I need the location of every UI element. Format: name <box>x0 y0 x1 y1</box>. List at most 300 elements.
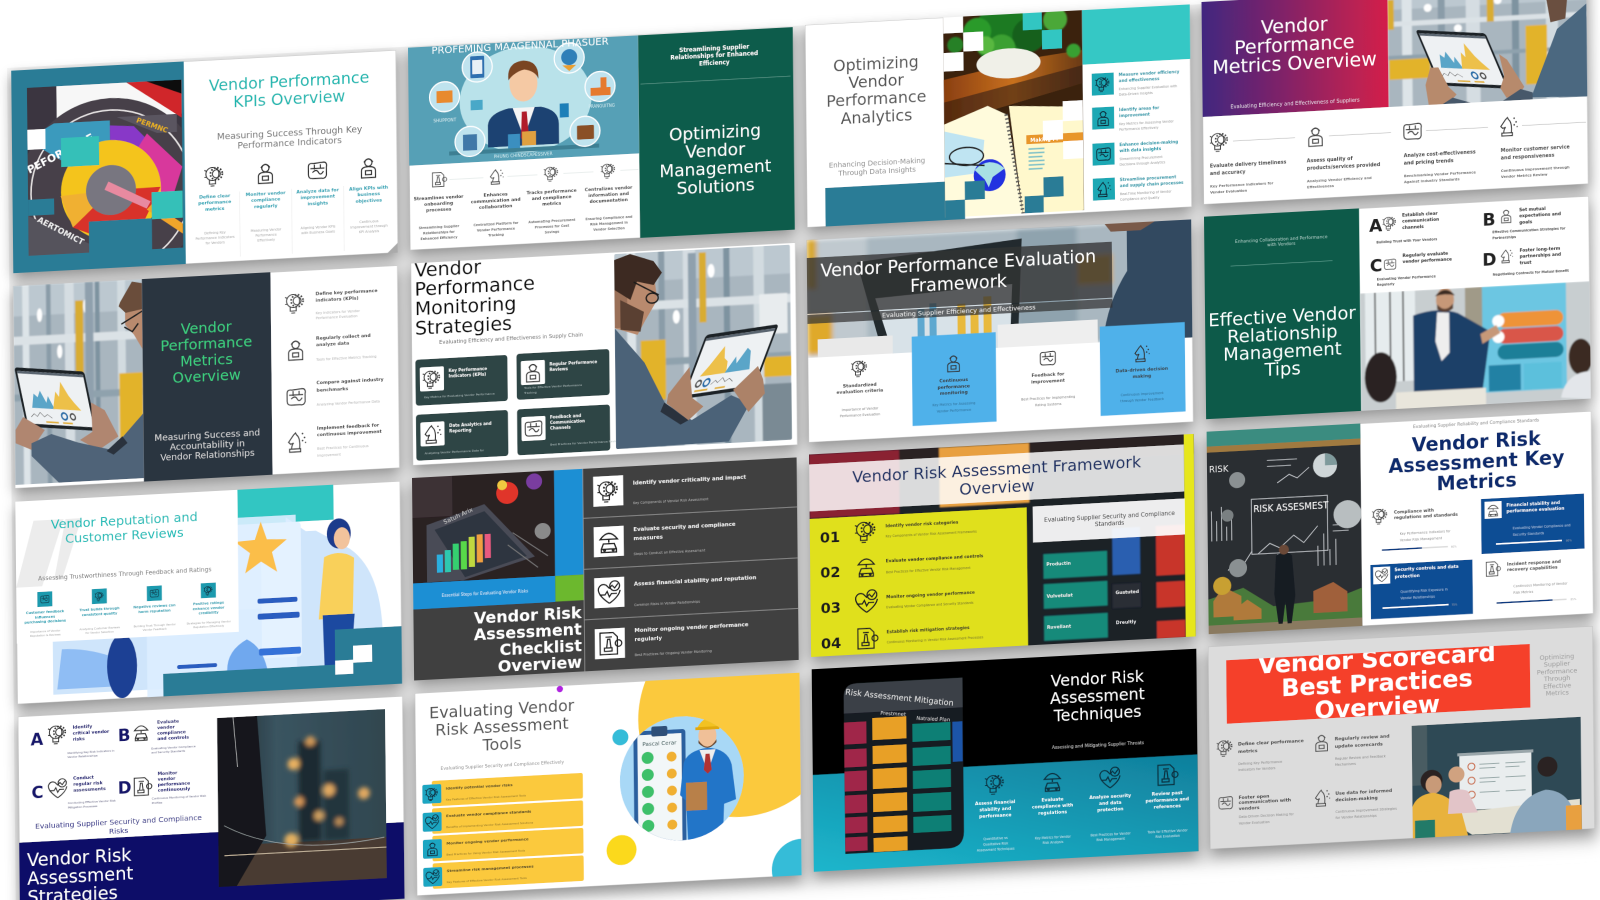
metric headings: Incident response and <box>1507 559 1561 568</box>
blue caption bar <box>413 576 555 610</box>
meeting photo <box>1360 280 1593 412</box>
risk headings: Evaluate <box>157 719 179 726</box>
risk headings: critical vendor <box>73 729 110 737</box>
desk photo <box>943 0 1084 226</box>
tip notes: Indicators for Vendors <box>1238 766 1276 772</box>
analytics list: improvement <box>1119 112 1150 118</box>
strategy cards: Key Performance <box>449 366 487 373</box>
review columns <box>24 582 232 638</box>
technique notes: Key Metrics for Vendor <box>1035 835 1072 840</box>
feature headings: Tracks performance <box>527 188 577 196</box>
subtitle band <box>807 299 1112 324</box>
metric notes: Key Performance Indicators for <box>1400 529 1451 536</box>
title: Framework <box>910 272 1008 297</box>
feature headings: processes <box>426 206 452 214</box>
side subtitle: Streamlining Supplier <box>679 44 749 54</box>
analytics list: with data insights <box>1119 146 1162 153</box>
title: Performance <box>826 87 926 111</box>
review columns: Importance of Vendor <box>30 628 61 634</box>
tip letters: D <box>1482 250 1497 271</box>
checklist notes <box>633 497 712 657</box>
side note: Optimizing <box>1540 652 1574 662</box>
metrics list <box>285 288 384 459</box>
title: Assessment Key <box>1388 446 1565 478</box>
subtitle: Through Data Insights <box>837 166 916 178</box>
tip headings: Foster open <box>1239 794 1269 801</box>
technique notes: Qualitative Risk <box>983 841 1008 847</box>
navy band <box>19 822 405 900</box>
metric headings <box>1394 500 1565 580</box>
subtitle: Vendor Relationships <box>160 449 255 464</box>
risk notes: Profiles <box>152 800 163 805</box>
label: board column: Prestmnet <box>880 711 906 718</box>
tip headings: trust <box>1520 260 1532 266</box>
progress bars: 85% <box>1571 597 1577 601</box>
metrics list: Analyzing Vendor Performance Data <box>317 399 380 407</box>
numbered items: Establish risk mitigation strategies <box>887 625 970 634</box>
metrics list: Key Indicators for Vendor <box>316 309 360 315</box>
feature headings: documentation <box>590 197 628 205</box>
blue base band <box>825 181 965 227</box>
banner title: Overview <box>1314 690 1440 725</box>
slide: Evaluating Vendor Risk Assessment Tools <box>414 607 844 900</box>
tip icons <box>1383 210 1513 270</box>
green accent <box>555 574 584 602</box>
timeline notes: Benchmarking Vendor Performance <box>1404 170 1476 178</box>
metric headings: recovery capabilities <box>1507 564 1558 573</box>
tip notes: Effective Communication Strategies for <box>1492 226 1566 234</box>
risk headings: Identify <box>73 724 92 731</box>
tip headings: Set mutual <box>1519 206 1546 213</box>
checklist headings: Evaluate security and compliance <box>633 522 736 533</box>
title: Vendor Performance Evaluation <box>820 247 1096 282</box>
technique notes: Assessment Techniques <box>977 846 1015 852</box>
turquoise header block <box>1082 4 1191 65</box>
progress bars <box>1382 538 1577 611</box>
KPI headings: Analyze data for <box>296 187 340 196</box>
tip headings: update scorecards <box>1335 741 1383 750</box>
checklist headings <box>633 474 757 643</box>
KPI notes: for Vendors <box>205 240 225 245</box>
title: Vendor <box>1261 13 1328 39</box>
title: Overview <box>959 476 1035 499</box>
timeline notes: Vendor Evaluation <box>1210 189 1248 195</box>
slide: Effective Vendor Relationship Management Tips <box>1204 196 1593 421</box>
tip notes: Building Trust with Your Vendors <box>1376 237 1437 244</box>
metrics list: Performance Evaluation <box>316 314 358 320</box>
framework icons <box>851 345 1150 377</box>
checklist headings: Identify vendor criticality and impact <box>633 475 746 487</box>
feature headings <box>414 185 633 214</box>
slide: Vendor Risk Assessment Key Metrics <box>1207 411 1593 635</box>
metric headings: regulations and standards <box>1394 512 1458 521</box>
slide: Vendor Risk Assessment Strategies <box>18 696 405 900</box>
label: gauge arc text: PEFORMACE <box>25 132 96 176</box>
KPI headings <box>198 185 388 213</box>
review columns: Positive ratings <box>193 601 224 606</box>
feature notes: Risk Management in <box>590 220 629 226</box>
metric headings: performance evaluation <box>1506 505 1564 515</box>
label: RISK on board: RISK <box>1209 465 1229 476</box>
tip notes: Partnerships <box>1492 235 1516 240</box>
timeline headings: and pricing trends <box>1404 158 1454 167</box>
KPI headings: Monitor vendor <box>246 190 286 198</box>
numbered items: Best Practices for Effective Vendor Risk Management <box>886 566 971 574</box>
dark panel <box>142 272 273 482</box>
title: Vendor <box>848 70 904 92</box>
label: tablet text: Satuh Arix <box>443 506 474 526</box>
white subtitle card <box>1033 498 1185 543</box>
title: Evaluating Vendor <box>429 696 575 723</box>
panel title: Management <box>1223 338 1342 366</box>
red banner <box>1226 644 1530 724</box>
title: Optimizing <box>833 52 919 76</box>
framework notes: Importance of Vendor <box>842 406 879 412</box>
tip notes: Regular Review and Feedback <box>1335 754 1386 761</box>
risk headings: compliance <box>157 729 186 737</box>
risk notes: Identifying Key Risk Indicators in <box>67 749 115 755</box>
metrics list: Best Practices for Continuous <box>317 444 369 451</box>
slide: Vendor Risk Assessment Framework Overview <box>809 434 1196 658</box>
analytics list: Data-Driven Insights <box>1119 91 1153 97</box>
KPI headings: improvement <box>300 194 336 202</box>
strategy cards: Feedback and <box>550 413 581 420</box>
timeline notes: Analyzing Vendor Efficiency and <box>1307 176 1372 183</box>
strategy cards: Channels <box>550 425 571 431</box>
metrics list: Compare against industry <box>316 377 384 386</box>
feature columns <box>432 162 638 187</box>
metric notes <box>1400 523 1571 601</box>
title: Tools <box>481 733 522 755</box>
timeline headings: products/services provided <box>1307 162 1381 172</box>
KPI headings: performance <box>198 199 231 207</box>
feature notes: Processes for Cost <box>535 224 570 229</box>
slide: Vendor Risk Assessment Checklist Overview <box>412 457 799 680</box>
label: illustration heading: PROFEMING MAAGENNAL PHASUER <box>431 36 609 57</box>
tool rows: Streamline risk management processes <box>447 864 534 873</box>
analytics list: Performance Effectively <box>1119 126 1159 132</box>
KPI headings: insights <box>307 200 328 207</box>
tool rows: Identify potential vendor risks <box>446 782 513 791</box>
title: Risk Assessment <box>435 714 569 740</box>
slide: Vendor Performance Metrics Overview gradient <box>1202 0 1590 204</box>
tip headings <box>1238 733 1392 812</box>
feature headings: Enhances <box>484 191 508 199</box>
columns <box>204 159 376 258</box>
timeline headings: Evaluate delivery timeliness <box>1210 160 1286 170</box>
numbered items: Continuous Monitoring in Vendor Risk Assessment Processes <box>887 635 984 644</box>
feature notes: Vendor Selection <box>593 226 625 232</box>
technique icons <box>985 764 1178 795</box>
desk tablet photo <box>412 470 555 584</box>
risk notes: and Security Standards <box>151 749 186 755</box>
feature notes: Ensuring Compliance and <box>585 215 633 221</box>
metric headings: Compliance with <box>1394 508 1434 516</box>
slide: Vendor Performance Metrics Overview dark <box>13 265 400 490</box>
timeline notes <box>1210 165 1570 195</box>
board labels <box>1046 557 1139 631</box>
tip notes: Vendor Evaluation <box>1239 820 1270 826</box>
framework headings: performance <box>937 383 970 391</box>
label: lower caption: PHUNG CHINDSCAPESSIVER <box>494 151 553 159</box>
KPI notes: KPI Analysis <box>359 229 379 234</box>
blue metric cards <box>1481 494 1585 554</box>
right yellow strip <box>1184 434 1196 637</box>
tip headings: Regularly evaluate <box>1402 251 1448 259</box>
purple dot <box>557 686 563 692</box>
feature headings: metrics <box>542 201 562 208</box>
slide: Vendor Performance Monitoring Strategies <box>411 239 798 467</box>
risk notes: Conducting Effective Vendor Risk <box>68 798 116 805</box>
framework headings: Feedback for <box>1031 371 1065 379</box>
title: KPIs Overview <box>233 86 345 111</box>
green side panel <box>638 27 795 238</box>
KPI headings: metrics <box>205 206 225 213</box>
board labels: Ruvellant <box>1047 624 1072 631</box>
tip notes: Negotiating Contracts for Mutual Benefit <box>1493 269 1569 277</box>
subtitle: Evaluating Efficiency and Effectiveness in Supply Chain <box>439 332 583 346</box>
technique headings: Assess financial <box>975 799 1016 807</box>
technique headings: references <box>1154 803 1181 811</box>
KPI notes: Continuous <box>359 219 379 224</box>
technique notes <box>977 826 1189 852</box>
risk headings: and controls <box>157 735 189 742</box>
feature headings: and compliance <box>532 194 572 202</box>
review columns: Reputation & Reviews <box>30 632 61 638</box>
framework headings: Standardized <box>843 382 877 390</box>
framework notes: Performance Evaluation <box>840 412 880 418</box>
feature notes <box>419 215 633 241</box>
numbered items: 03 <box>821 599 841 617</box>
title: Monitoring <box>415 293 516 320</box>
title: Vendor <box>414 256 481 282</box>
KPI notes: Performance Indicators <box>195 235 235 241</box>
metric notes: Security Standards <box>1513 531 1544 537</box>
framework headings: making <box>1133 373 1151 380</box>
tip notes: Regularly <box>1377 282 1395 287</box>
tip letters: B <box>1482 210 1496 231</box>
analytics list: and supply chain processes <box>1120 180 1184 188</box>
review columns: Negative reviews can <box>133 603 176 609</box>
framework notes: Key Metrics for Assessing <box>932 401 975 407</box>
strategy cards: Tools for Effective Vendor Performance <box>523 383 582 390</box>
feature notes: Streamlining Supplier <box>419 224 460 230</box>
metrics list: Regularly collect and <box>316 333 371 342</box>
subtitle: Enhancing Decision-Making <box>829 157 925 170</box>
analytics list: Enhance decision-making <box>1119 139 1178 147</box>
strategy cards: Regular Performance <box>549 359 597 367</box>
numbered items: 01 <box>820 529 840 547</box>
checklist headings: regularly <box>634 636 663 643</box>
letters <box>30 725 132 803</box>
tool rows: Evaluate vendor compliance standards <box>446 809 532 818</box>
banner title: Best Practices <box>1281 664 1473 702</box>
subtitle: Evaluating Efficiency and Effectiveness of Suppliers <box>1230 98 1360 111</box>
title: Strategies <box>415 313 512 340</box>
numbered items <box>820 516 985 653</box>
tablet photo <box>614 243 793 456</box>
white text panel <box>15 490 239 644</box>
strategy cards: Indicators (KPIs) <box>449 372 486 379</box>
analytics list: Streamline procurement <box>1120 174 1176 182</box>
checklist notes: Steps to Conduct an Effective Assessment <box>634 548 706 556</box>
KPI headings: Align KPIs with <box>349 185 388 193</box>
tip headings <box>1402 204 1561 273</box>
yellow dot <box>606 834 637 866</box>
city photo <box>217 709 387 887</box>
metrics list: Define key performance <box>316 288 378 297</box>
metrics list: Tools for Effective Metrics Tracking <box>315 355 377 362</box>
tip headings: Use data for informed <box>1335 788 1392 797</box>
numbered items: Key Components of Vendor Risk Assessment Frameworks <box>886 530 977 538</box>
analytics list: Compliance and Quality <box>1120 196 1160 202</box>
numbered items: Evaluating Vendor Compliance and Security Standards <box>886 601 974 609</box>
numbered items: 02 <box>820 564 841 582</box>
gauge image <box>26 80 184 256</box>
subtitle: Standards <box>1095 521 1124 528</box>
risk headings: vendor <box>157 724 176 731</box>
title: Vendor Risk <box>1412 427 1542 457</box>
side note: Metrics <box>1546 688 1570 698</box>
side note: Effective <box>1543 681 1571 691</box>
metric headings: protection <box>1395 573 1420 580</box>
framework headings <box>836 366 1168 403</box>
framework headings: improvement <box>1031 378 1066 385</box>
subtitle: Assessing Trustworthiness Through Feedback and Ratings <box>38 566 212 583</box>
strategy cards: Communication <box>550 418 585 425</box>
metric icons <box>1372 501 1502 584</box>
tip headings: Foster long-term <box>1520 246 1561 254</box>
KPI notes <box>196 220 388 244</box>
title: Vendor Reputation and <box>51 510 198 533</box>
teal lower band <box>813 754 1199 872</box>
timeline headings <box>1210 144 1571 177</box>
risk board photo <box>843 677 965 855</box>
subtitle: Evaluating Supplier Security and Compliance Effectively <box>441 759 564 772</box>
numbered items: Evaluate vendor compliance and controls <box>886 553 984 563</box>
feature notes: Centralized Platform for <box>473 221 519 227</box>
quote mark <box>16 518 82 588</box>
risk notes: Evaluating Vendor Compliance <box>151 744 196 751</box>
side note: Performance <box>1537 666 1577 677</box>
technique notes: Quantitative vs <box>983 836 1008 841</box>
framework notes: through Vendor Feedback <box>1120 397 1164 403</box>
person <box>318 518 355 690</box>
review columns: influences <box>35 614 55 620</box>
technique headings: Analyze security <box>1089 793 1131 801</box>
progress bars: 75% <box>1452 602 1458 607</box>
title: Performance <box>414 272 535 301</box>
feature headings: Streamlines vendor <box>414 194 464 202</box>
risk icons <box>48 721 152 800</box>
manager illustration <box>408 35 639 166</box>
chalkboard photo <box>1207 423 1363 635</box>
teal dot <box>612 729 628 746</box>
feature headings: communication and <box>471 197 521 205</box>
tip notes: Mechanisms <box>1335 762 1356 767</box>
tip letters: A <box>1369 216 1383 237</box>
tip notes: Data-Driven Decision Making for <box>1239 812 1294 819</box>
tip headings: partnerships and <box>1520 252 1561 260</box>
KPI headings: business <box>357 191 380 198</box>
timeline headings: Monitor customer service <box>1501 144 1571 154</box>
tool rows: Benefits of Implementing Vendor Risk Assessment Solutions <box>446 821 534 829</box>
technique notes: Tools for Effective Vendor <box>1146 828 1188 834</box>
review columns: harm reputation <box>138 608 171 614</box>
technique headings: stability and <box>979 806 1011 813</box>
teal left panel <box>11 61 186 273</box>
timeline headings: Assess quality of <box>1307 156 1354 164</box>
tool rows: Key Features of Effective Vendor Risk Assessment Tools <box>446 793 526 802</box>
metrics list: Implement feedback for <box>317 422 380 432</box>
tip headings: metrics <box>1238 748 1258 755</box>
timeline notes: Effectiveness <box>1307 184 1334 189</box>
checklist headings: Assess financial stability and reputation <box>634 575 756 588</box>
technique notes: Risk Analysis <box>1043 840 1064 845</box>
timeline notes: Continuous Improvement through <box>1501 165 1570 173</box>
tip notes <box>1238 754 1397 826</box>
KPI notes: Performance <box>255 233 277 238</box>
risk headings: continuously <box>158 786 190 794</box>
subtitle: Accountability in <box>170 439 245 453</box>
panel title: Tips <box>1263 358 1301 381</box>
slide: Vendor Risk Assessment Techniques <box>812 649 1199 872</box>
illustration <box>51 482 384 718</box>
title: Vendor Performance <box>209 68 369 95</box>
title: Performance <box>160 334 252 355</box>
analytics list: Key Metrics for Assessing Vendor <box>1119 119 1174 126</box>
tip headings: expectations and <box>1519 211 1561 220</box>
KPI headings: regularly <box>254 203 278 210</box>
review columns: Analyzing Customer Reviews <box>79 625 120 631</box>
feature notes: Enhanced Efficiency <box>421 235 458 241</box>
title: Assessment <box>1050 684 1145 708</box>
analytics list: Streamlining Procurement <box>1120 155 1163 161</box>
review columns: Reputation Effectively <box>193 623 224 629</box>
metric notes: Quantifying Risk Exposure in <box>1400 587 1448 594</box>
risk headings: regular risk <box>73 780 104 788</box>
KPI notes: Aligning Vendor KPIs <box>301 224 336 230</box>
feature headings: information and <box>588 191 629 199</box>
title: Analytics <box>841 105 912 128</box>
framework notes: Vendor Performance <box>937 408 971 413</box>
tool rows <box>422 773 584 889</box>
analytics list: and effectiveness <box>1119 76 1160 83</box>
tip notes: Evaluating Vendor Performance <box>1377 274 1437 281</box>
tip headings: vendors <box>1239 805 1260 812</box>
metric notes: Vendor Relationships <box>1400 595 1435 600</box>
side note: Supplier <box>1544 660 1571 669</box>
risk notes: Vendor Relationships <box>67 753 98 759</box>
tip notes: Continuous Improvement Strategies <box>1335 807 1397 814</box>
numbered items: Monitor ongoing vendor performance <box>886 590 975 599</box>
title: Metrics Overview <box>1212 48 1377 79</box>
metric notes: Risk Metrics <box>1513 590 1534 595</box>
tip notes <box>1376 226 1569 287</box>
tip headings: decision-making <box>1335 795 1378 803</box>
metrics list: Improvement <box>317 453 341 458</box>
title band <box>809 444 1184 512</box>
technique headings: performance <box>979 812 1012 820</box>
caption: Essential Steps for Evaluating Vendor Risks <box>442 588 528 598</box>
checklist notes: Key Components of Vendor Risk Assessment <box>633 497 709 505</box>
timeline headings: Analyze cost-effectiveness <box>1404 149 1476 159</box>
analytics list: Decisions through Analytics <box>1120 160 1166 167</box>
board photo <box>809 434 1196 658</box>
metric notes: Vendor Risk Management <box>1400 536 1443 542</box>
side subtitle: Relationships for Enhanced <box>670 51 758 62</box>
risk notes: Mitigation Processes <box>68 804 98 810</box>
